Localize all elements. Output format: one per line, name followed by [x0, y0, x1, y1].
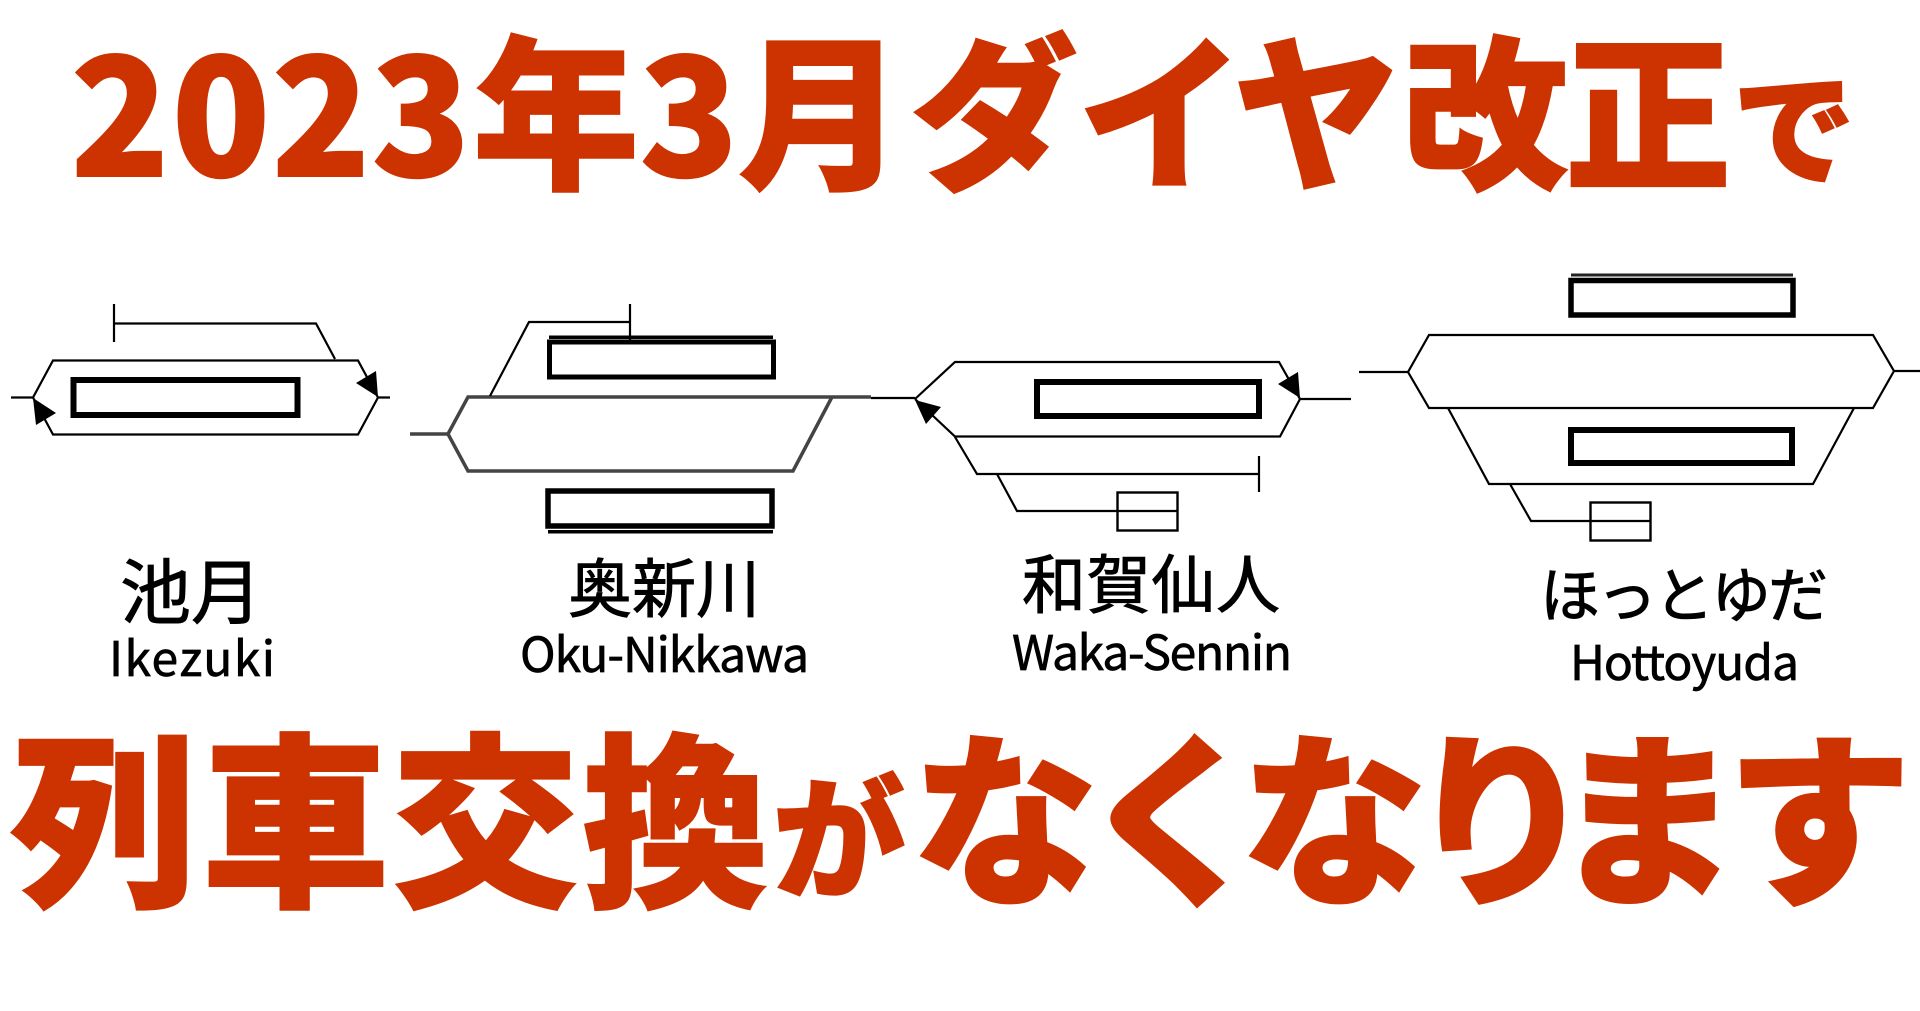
diagram: Ikezuki station track layout [11, 304, 390, 434]
platform: Hottoyuda upper platform [1571, 274, 1793, 315]
platform: Ikezuki island platform [74, 380, 298, 415]
platform: Waka-Sennin island platform [1037, 382, 1259, 416]
diagram: Waka-Sennin station track layout [915, 362, 1351, 530]
label: Ikezuki station name [109, 537, 275, 690]
label: Hottoyuda station name: Hottoyuda [1570, 624, 1799, 694]
label: Waka-Sennin station name: Waka-Sennin [1012, 614, 1292, 684]
label: Ikezuki station name: Ikezuki [109, 620, 275, 690]
title: top headline [71, 0, 1855, 224]
label: Ikezuki station name: 池月 [120, 537, 262, 639]
title: bottom headline: 列車交換 [10, 675, 769, 946]
building: Hottoyuda siding box [1590, 502, 1650, 540]
arrow: Ikezuki left one-way marker [33, 398, 56, 425]
arrow: Ikezuki right one-way marker [356, 371, 378, 397]
label: Waka-Sennin station name: 和賀仙人 [1022, 535, 1280, 627]
arrow: Waka-Sennin right one-way marker [1278, 372, 1300, 398]
label: Oku-Nikkawa station name [520, 539, 809, 686]
title: bottom headline [10, 674, 1912, 946]
diagram: Hottoyuda station track layout [1359, 274, 1920, 540]
label: Waka-Sennin station name [1012, 535, 1292, 684]
arrow: Waka-Sennin left one-way marker [915, 400, 941, 424]
platform: Oku-Nikkawa upper platform [549, 336, 774, 377]
label: Hottoyuda station name: ほっとゆだ [1540, 548, 1828, 635]
title: bottom headline: が [773, 735, 905, 926]
title: bottom headline: なくなります [912, 674, 1912, 944]
title: top headline: で [1733, 34, 1855, 211]
label: Oku-Nikkawa station name: 奥新川 [568, 539, 760, 631]
platform: Oku-Nikkawa lower platform [548, 491, 773, 534]
label: Hottoyuda station name [1540, 548, 1828, 694]
label: Oku-Nikkawa station name: Oku-Nikkawa [520, 616, 809, 686]
building: Waka-Sennin siding box [1118, 492, 1178, 530]
platform: Hottoyuda lower platform [1571, 430, 1792, 463]
diagram: Oku-Nikkawa station track layout [410, 304, 915, 534]
